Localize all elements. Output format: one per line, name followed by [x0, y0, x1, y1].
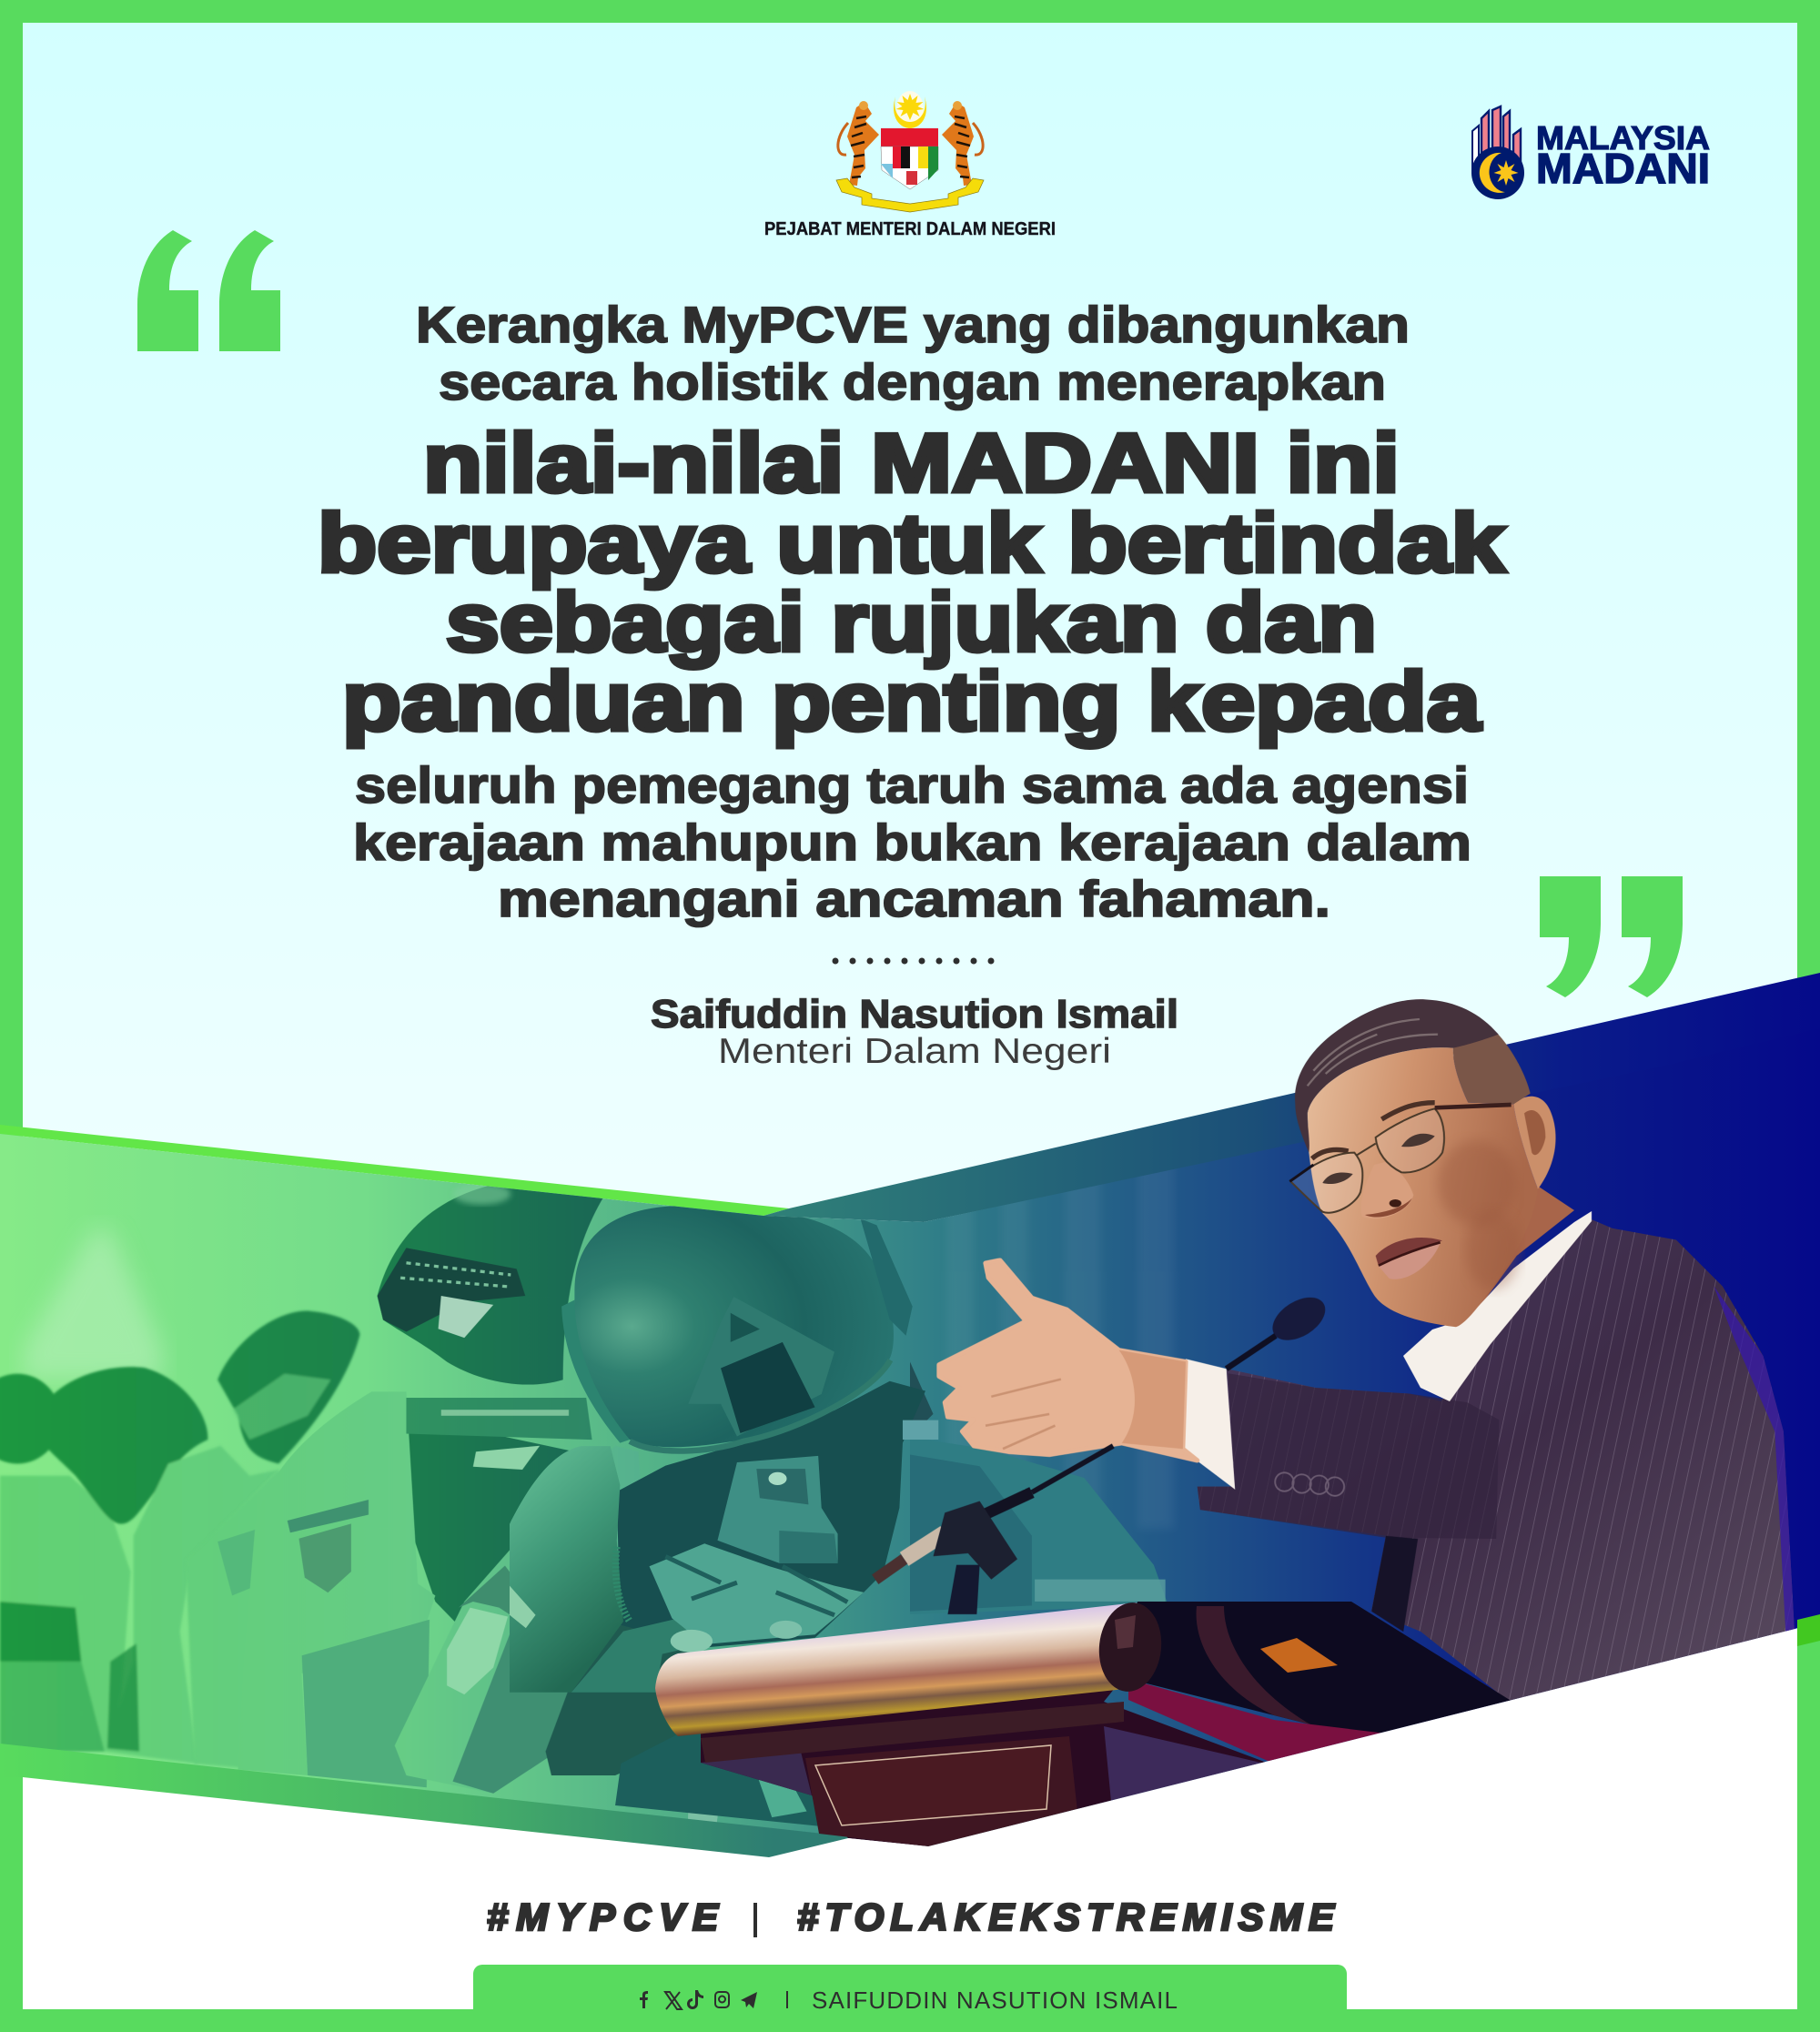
- office name: PEJABAT MENTERI DALAM NEGERI: [764, 219, 1056, 239]
- footer tab: [473, 1965, 1347, 2009]
- lectern lower body: [701, 1688, 1356, 1846]
- background soldier behind hand: [910, 1361, 1168, 1614]
- hashtag line: #MYPCVE: [487, 1896, 720, 1938]
- eyebrows: [1312, 1103, 1435, 1158]
- soldiers photo: [0, 1156, 1174, 1835]
- social media icons: [640, 1990, 757, 2009]
- hand: [939, 1260, 1198, 1461]
- footer name: SAIFUDDIN NASUTION ISMAIL: [812, 1987, 1178, 2014]
- dotted divider: [832, 957, 994, 965]
- purple rim light: [1714, 1287, 1795, 1646]
- photo banner background: [0, 973, 1820, 1846]
- quote closing text: kerajaan mahupun bukan kerajaan dalam: [353, 814, 1471, 871]
- microphone: [875, 1289, 1333, 1614]
- footer divider: [786, 1991, 788, 2008]
- mouth: [1376, 1238, 1442, 1267]
- Malaysia Madani logo: MALAYSIA: [1536, 119, 1710, 157]
- speaker and lectern photo: [655, 999, 1795, 1846]
- hashtag line: [487, 1896, 1336, 1938]
- curtain stripes: [946, 1156, 1174, 1529]
- quote intro text: [416, 296, 1410, 410]
- shirt collar: [1403, 1211, 1592, 1401]
- shirt cuff: [1183, 1359, 1235, 1490]
- neck: [1478, 1187, 1574, 1307]
- chrome lectern cylinder: [655, 1600, 1166, 1736]
- quote highlighted text: berupaya untuk bertindak: [318, 498, 1505, 590]
- quote highlighted text: sebagai rujukan dan: [446, 577, 1377, 669]
- glasses: [1290, 1108, 1444, 1213]
- Malaysia Madani logo: [1471, 106, 1710, 199]
- ear: [1513, 1097, 1556, 1189]
- quote highlighted text: nilai-nilai MADANI ini: [423, 418, 1400, 510]
- front soldier arm and glove: [395, 1446, 910, 1835]
- far left soldiers: [0, 1310, 359, 1764]
- eyes: [1322, 1134, 1435, 1184]
- coat of arms logo: [836, 91, 984, 212]
- quote closing text: menangani ancaman fahaman.: [498, 870, 1330, 927]
- Malaysia Madani logo: MADANI: [1536, 145, 1710, 192]
- quote highlighted text: panduan penting kepada: [342, 656, 1482, 748]
- front soldier helmet and rifle: [510, 1206, 938, 1693]
- hair fade: [1453, 1031, 1531, 1104]
- quote intro text: secara holistik dengan menerapkan: [439, 353, 1386, 410]
- jacket torso: [1198, 1219, 1795, 1710]
- nose: [1360, 1162, 1413, 1218]
- cuff buttons: [1275, 1472, 1344, 1496]
- quote highlighted text: [318, 418, 1505, 748]
- quote intro text: Kerangka MyPCVE yang dibangunkan: [416, 296, 1410, 353]
- speaker name: Saifuddin Nasution Ismail: [651, 992, 1178, 1036]
- quote closing text: [353, 756, 1471, 927]
- sleeve shadow: [1198, 1373, 1499, 1539]
- hair: [1295, 999, 1499, 1153]
- speaker head: [1289, 999, 1592, 1401]
- middle soldier: [186, 1181, 603, 1787]
- face: [1308, 1047, 1538, 1327]
- bottom gradient band: [0, 1744, 848, 1857]
- lectern top panel: [1128, 1602, 1524, 1764]
- speaker role: Menteri Dalam Negeri: [718, 1032, 1111, 1071]
- opening quotation mark: [137, 230, 280, 351]
- hashtag line: #TOLAKEKSTREMISME: [797, 1896, 1336, 1938]
- room lamp glow: [24, 1230, 163, 1380]
- quote closing text: seluruh pemegang taruh sama ada agensi: [355, 756, 1469, 814]
- closing quotation mark: [1540, 876, 1683, 997]
